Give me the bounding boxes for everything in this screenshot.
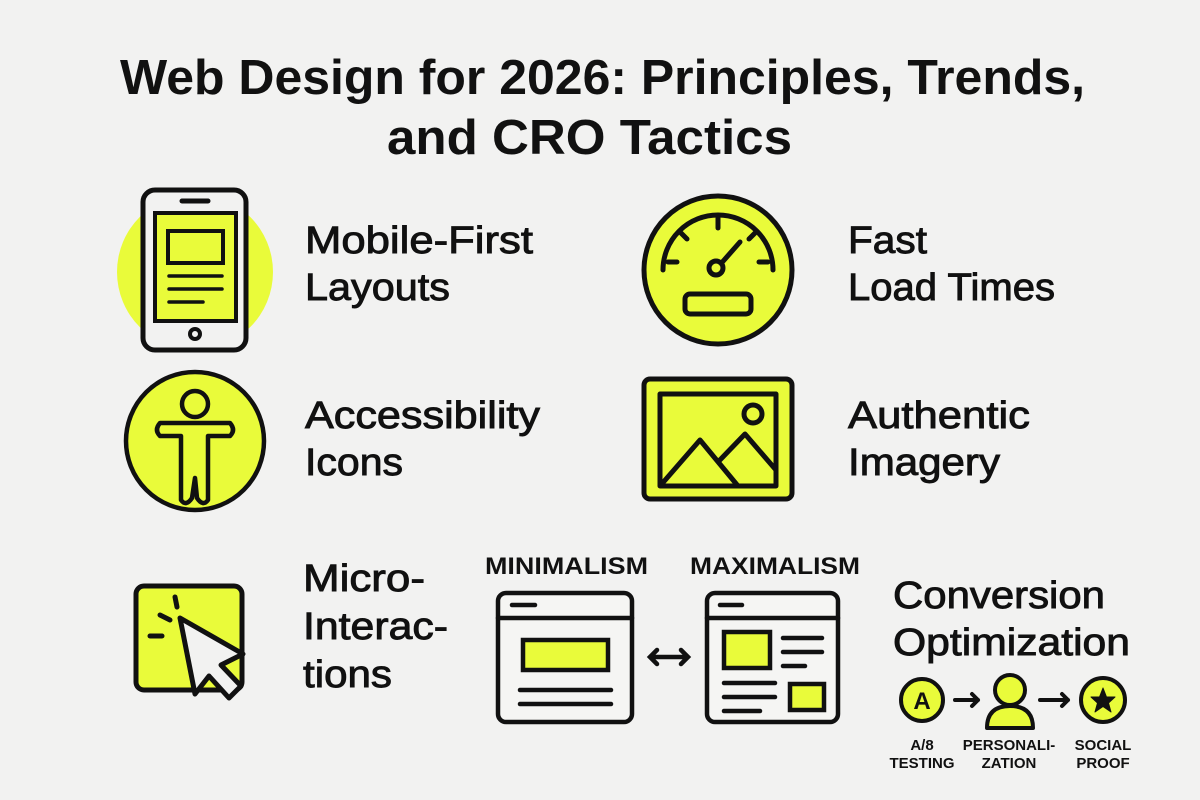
text: micro-interactions: Interac-: [303, 606, 448, 648]
CRO labels: [889, 737, 1131, 772]
CRO labels: A/8: [910, 737, 934, 754]
text: fast load: Load Times: [848, 267, 1055, 309]
minimalism vs maximalism: MINIMALISM: [485, 553, 648, 580]
text: authentic: [848, 395, 1030, 484]
text: conversion optimization: Optimization: [893, 622, 1130, 664]
text: conversion optimization: [893, 575, 1130, 664]
CRO labels: SOCIAL: [1075, 737, 1131, 754]
CRO labels: PERSONALI-: [963, 737, 1055, 754]
text: accessibility: Accessibility: [305, 395, 540, 437]
text: accessibility: Icons: [305, 442, 403, 484]
CRO labels: ZATION: [982, 755, 1036, 772]
title: [120, 51, 1085, 165]
text: mobile-first: Mobile-First: [305, 220, 533, 262]
text: authentic: Imagery: [848, 442, 1000, 484]
icon: image: [644, 379, 792, 499]
text: mobile-first: [305, 220, 533, 309]
text: mobile-first: Layouts: [305, 267, 450, 309]
CRO labels: TESTING: [889, 755, 955, 772]
icon: gauge: [644, 196, 792, 344]
minimalism vs maximalism: [485, 553, 860, 722]
title: Web Design for 2026: Principles, Trends,: [120, 51, 1085, 105]
text: micro-interactions: Micro-: [303, 558, 425, 600]
text: conversion optimization: Conversion: [893, 575, 1105, 617]
icon: accessibility: [126, 372, 264, 510]
text: micro-interactions: tions: [303, 654, 392, 696]
CRO labels: PROOF: [1076, 755, 1130, 772]
text: A: [913, 688, 931, 715]
text: micro-interactions: [303, 558, 448, 696]
text: fast load: Fast: [848, 220, 927, 262]
CRO flow: [901, 675, 1125, 728]
icon: mobile phone: [117, 190, 273, 350]
title: and CRO Tactics: [387, 111, 792, 165]
text: fast load: [848, 220, 1055, 309]
text: authentic: Authentic: [848, 395, 1030, 437]
text: accessibility: [305, 395, 540, 484]
icon: micro-interaction cursor: [136, 586, 243, 698]
minimalism vs maximalism: MAXIMALISM: [690, 553, 860, 580]
